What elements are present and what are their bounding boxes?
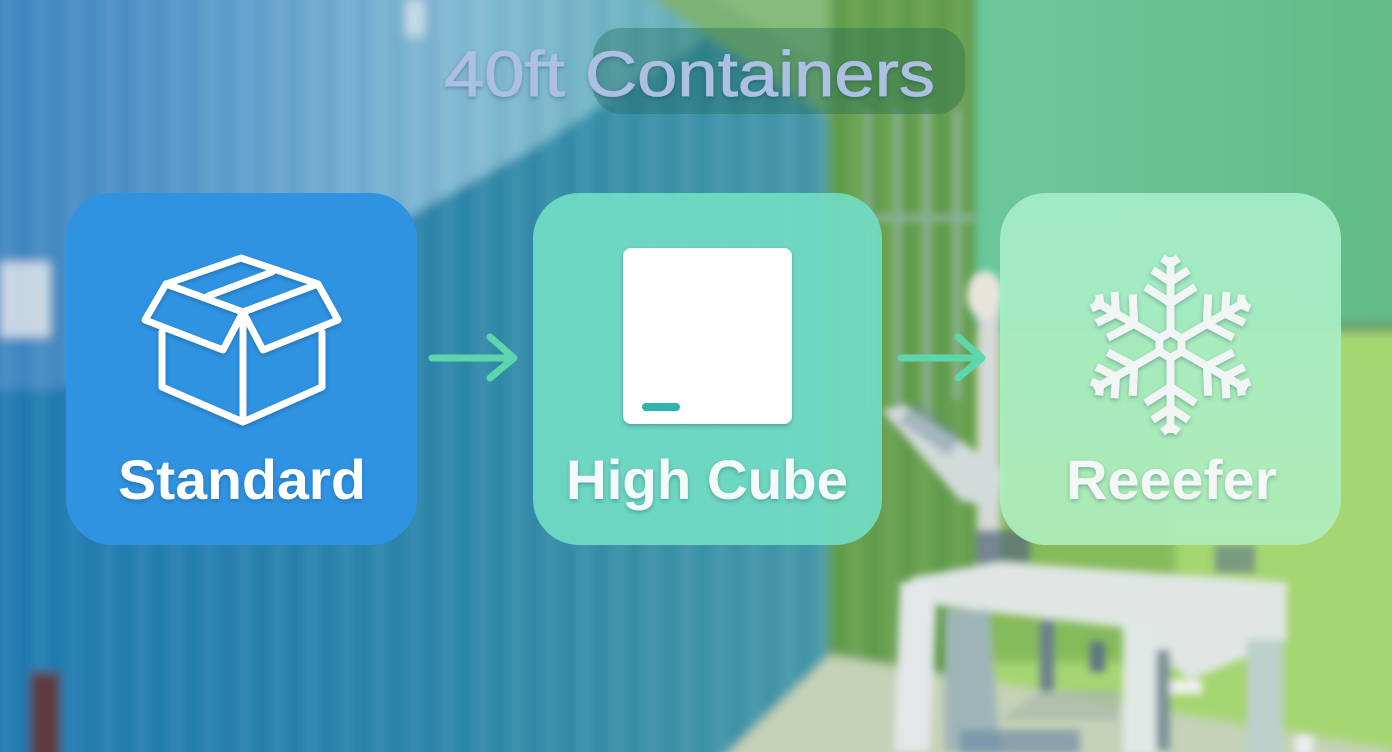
label: High Cube: High Cube (566, 448, 848, 511)
panel: Standard (66, 193, 417, 545)
arrow: Standard to High Cube (432, 337, 514, 378)
title: 40ft Containers (444, 38, 935, 110)
icon: white square (623, 248, 792, 424)
label: Reeefer: Reeefer (1066, 448, 1277, 511)
icon: open box (145, 258, 338, 422)
label: Standard: Standard (118, 448, 366, 511)
background: fence (860, 110, 976, 420)
background: robot machine (882, 271, 1313, 752)
panel: Reeefer (1000, 193, 1341, 545)
icon: snowflake (1082, 257, 1259, 433)
arrow: High Cube to Reeefer (901, 337, 982, 378)
panel: High Cube (533, 193, 882, 545)
title pill (593, 28, 965, 114)
